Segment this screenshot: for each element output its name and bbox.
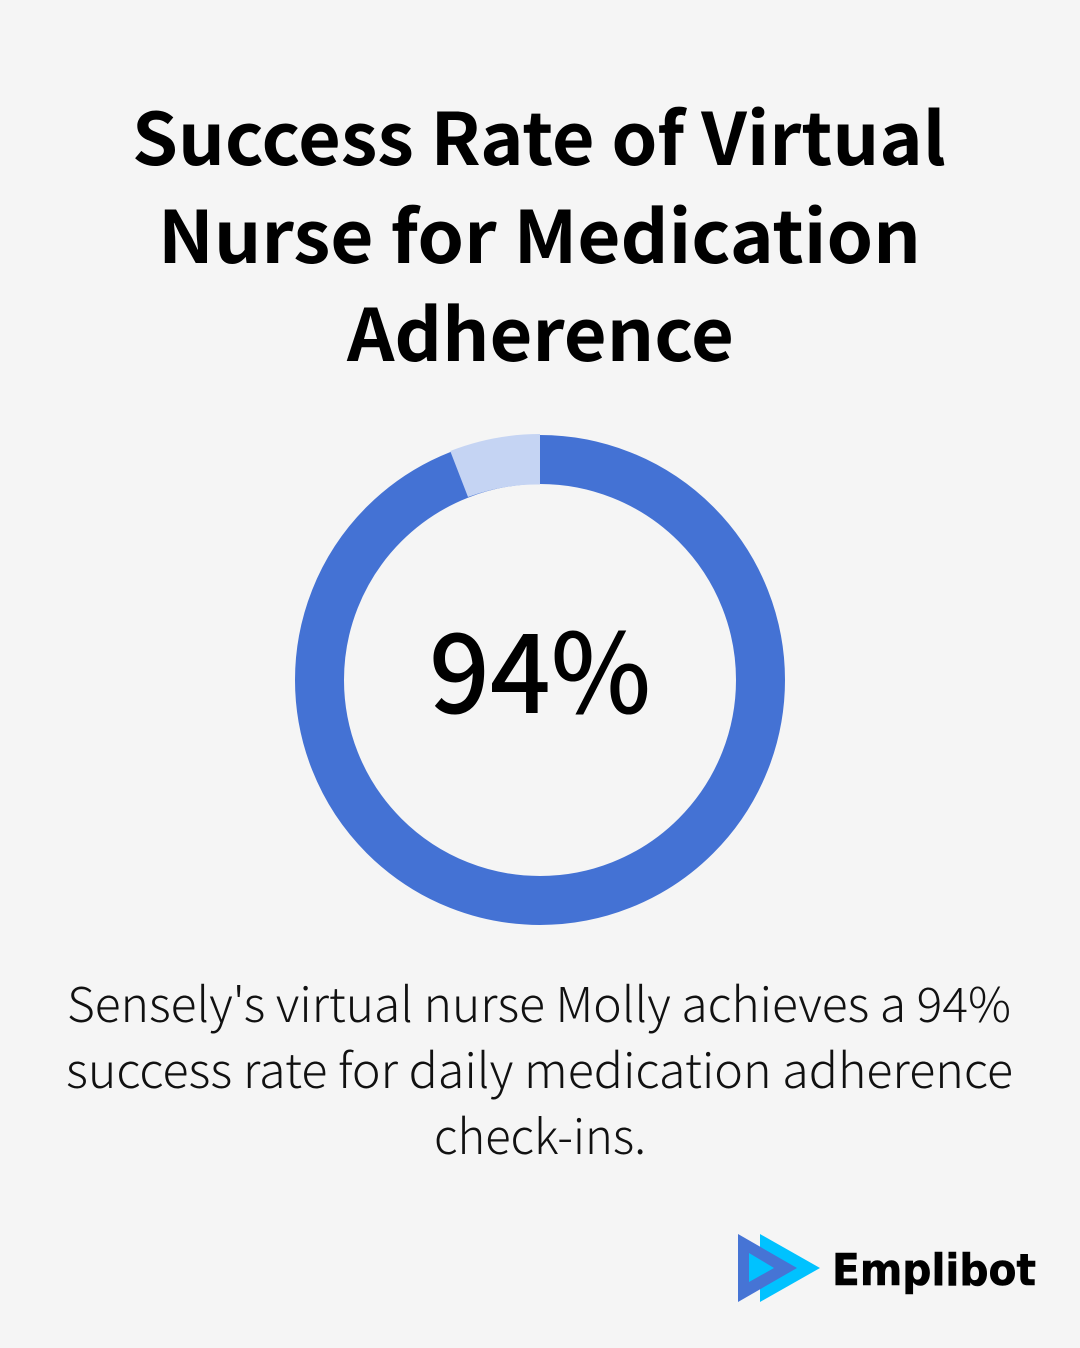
icon: play triangles [738, 1234, 820, 1302]
description text: Sensely's virtual nurse Molly achieves a 94% [67, 966, 1011, 1036]
title: Nurse for Medication [158, 179, 921, 284]
description text: success rate for daily medication adherence [66, 1032, 1013, 1102]
description text: check-ins. [434, 1098, 646, 1168]
logo: Emplibot [738, 1234, 1036, 1302]
value: 94%: 94% [429, 585, 651, 745]
donut chart: 94% [320, 434, 760, 900]
title: Success Rate of Virtual [132, 81, 946, 186]
title [132, 81, 946, 382]
description text [66, 966, 1013, 1168]
title: Adherence [346, 277, 734, 382]
logo wordmark: Emplibot [832, 1245, 1036, 1296]
